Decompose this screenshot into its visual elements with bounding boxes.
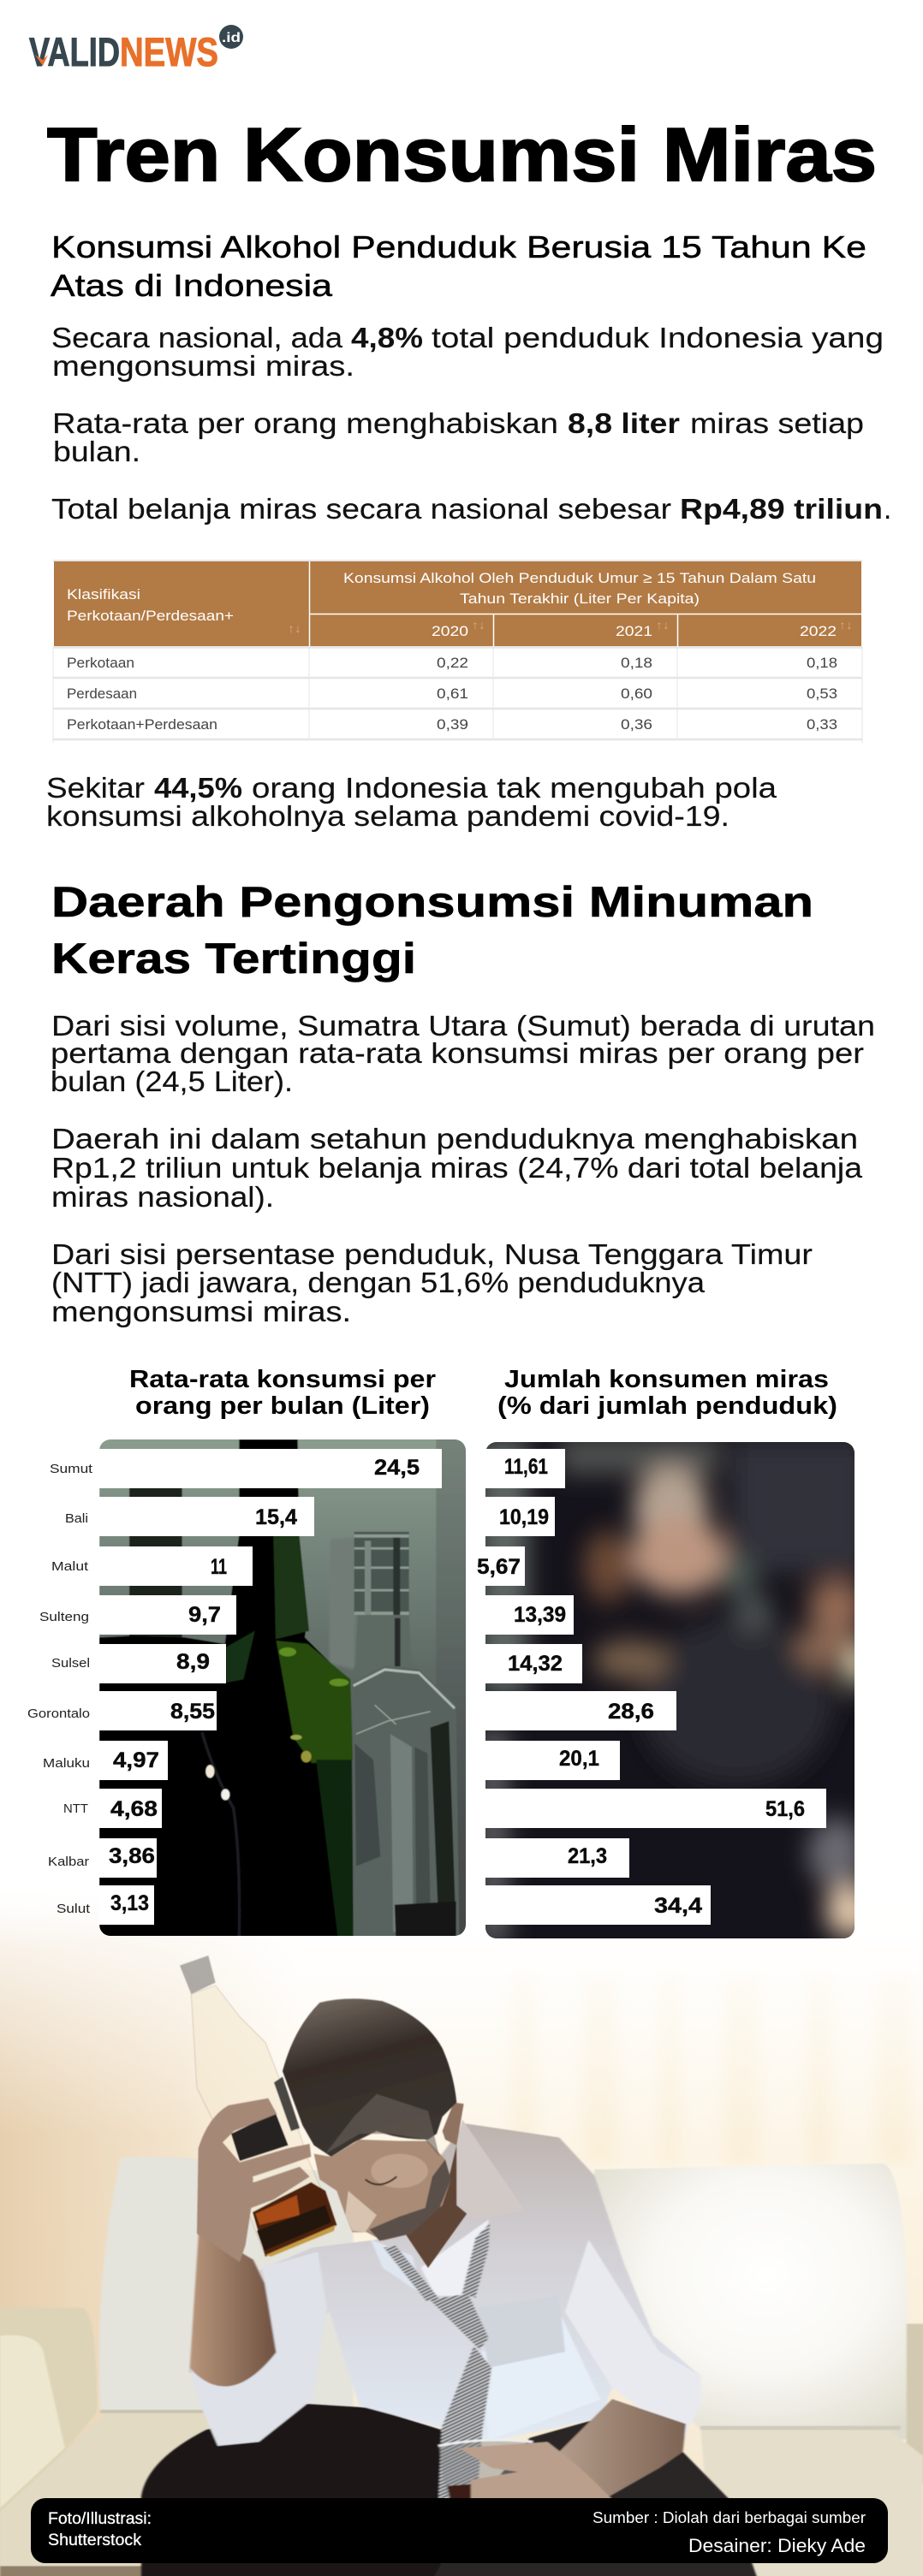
text block: regional findings: bulan (24,5 Liter). xyxy=(51,1065,293,1097)
table row: Perdesaan: 0,53 xyxy=(807,686,837,702)
subheading: national consumption: Konsumsi Alkohol Penduduk Berusia 15 Tahun Ke xyxy=(51,229,866,264)
bar chart: average litres per person per month xyxy=(27,1449,442,1925)
photo credit: Shutterstock xyxy=(48,2531,142,2549)
photo panel: bottles xyxy=(99,1438,470,1947)
table header xyxy=(54,561,861,646)
neck xyxy=(405,2146,471,2268)
subheading: national consumption xyxy=(51,229,866,303)
table row: Perkotaan xyxy=(67,655,837,671)
table row: Perkotaan+Perdesaan: Perkotaan+Perdesaan xyxy=(67,716,217,733)
text block: regional findings xyxy=(51,1010,875,1327)
text block: national figures: Rp4,89 triliun xyxy=(680,493,883,525)
bar values: 15,4 xyxy=(255,1505,297,1529)
region labels: Sulut xyxy=(57,1902,91,1916)
footer bar: credits xyxy=(31,2498,888,2563)
bar values: 8,9 xyxy=(176,1650,210,1674)
glass and hand xyxy=(438,2440,533,2500)
bar values: 20,1 xyxy=(559,1747,599,1771)
logo: Validnews.id: .id xyxy=(222,31,241,45)
text block: regional findings: Dari sisi persentase penduduk, Nusa Tenggara Timur xyxy=(51,1238,813,1270)
region labels: Bali xyxy=(65,1511,88,1526)
bar values: 10,19 xyxy=(499,1505,549,1529)
title: Tren Konsumsi Miras xyxy=(47,112,877,197)
table row: Perdesaan xyxy=(67,686,837,702)
clear bottle xyxy=(350,1532,460,1947)
table row: Perkotaan: 0,18 xyxy=(807,655,837,671)
bar values: 11 xyxy=(211,1555,227,1579)
subheading: national consumption: Atas di Indonesia xyxy=(51,268,333,303)
section heading: highest consuming regions: Daerah Pengonsumsi Minuman xyxy=(51,878,813,926)
shirt xyxy=(256,2123,700,2442)
region labels: Gorontalo xyxy=(27,1706,90,1721)
trousers xyxy=(141,2404,442,2576)
table row: Perkotaan+Perdesaan xyxy=(67,716,837,733)
chart heading: average consumption xyxy=(129,1366,436,1420)
photo panel: blurred drinker xyxy=(479,1438,876,1947)
table row: Perkotaan: Perkotaan xyxy=(67,655,134,671)
tie xyxy=(384,2223,491,2498)
bar values: 8,55 xyxy=(170,1700,215,1724)
section heading: highest consuming regions xyxy=(51,878,813,982)
bars xyxy=(99,1449,442,1925)
bar values: 21,3 xyxy=(568,1844,607,1868)
bar values: 51,6 xyxy=(765,1797,805,1821)
table row: Perdesaan: 0,61 xyxy=(437,686,468,702)
sofa xyxy=(0,2157,923,2576)
text block: regional findings: miras nasional). xyxy=(51,1181,274,1213)
table header: Konsumsi Alkohol Oleh Penduduk Umur ≥ 15 Tahun Dalam Satu xyxy=(343,570,816,586)
table header: ↑↓ xyxy=(472,618,485,632)
top fade into page xyxy=(0,1883,923,1943)
table: alcohol consumption per capita xyxy=(53,560,862,743)
bars xyxy=(485,1449,826,1925)
table header: 2021 xyxy=(616,623,652,639)
text block: national figures: Total belanja miras secara nasional sebesar xyxy=(51,493,671,525)
table header: ↑↓ xyxy=(839,618,853,632)
head, bottle and hand xyxy=(180,1956,525,2268)
raised arm xyxy=(188,2234,277,2387)
source and designer: Sumber : Diolah dari berbagai sumber xyxy=(593,2509,866,2526)
table row: Perkotaan+Perdesaan: 0,36 xyxy=(621,716,652,733)
bar values xyxy=(109,1456,420,1915)
table row: Perkotaan+Perdesaan: 0,33 xyxy=(807,716,837,733)
section heading: highest consuming regions: Keras Tertinggi xyxy=(51,935,416,982)
text block: national figures: Rata-rata per orang menghabiskan xyxy=(52,407,558,439)
region labels: Sulteng xyxy=(39,1610,89,1624)
face xyxy=(314,2103,464,2241)
table header: Klasifikasi xyxy=(67,586,140,602)
region labels: Sumut xyxy=(50,1462,93,1476)
region labels: Malut xyxy=(51,1559,89,1574)
bar values: 3,13 xyxy=(110,1891,149,1915)
table header: 2022 xyxy=(800,623,837,639)
source and designer: Desainer: Dieky Ade xyxy=(688,2535,866,2556)
chart heading: average consumption: orang per bulan (Liter) xyxy=(135,1392,430,1420)
table header: Tahun Terakhir (Liter Per Kapita) xyxy=(460,591,700,607)
region labels xyxy=(27,1462,93,1916)
source and designer xyxy=(593,2509,866,2556)
text block: regional findings: Dari sisi volume, Sumatra Utara (Sumut) berada di urutan xyxy=(51,1010,875,1042)
region labels: Maluku xyxy=(43,1756,90,1771)
text block: national figures xyxy=(51,322,891,525)
bar values: 4,68 xyxy=(110,1797,158,1821)
text block: pandemic behaviour: Sekitar xyxy=(46,772,145,804)
man: body xyxy=(141,2123,759,2576)
text block: national figures: Secara nasional, ada xyxy=(51,322,343,353)
text block: national figures: bulan. xyxy=(53,436,140,467)
bar values: 14,32 xyxy=(508,1652,563,1676)
text block: regional findings: Daerah ini dalam setahun penduduknya menghabiskan xyxy=(51,1123,858,1154)
table row: Perdesaan: 0,60 xyxy=(621,686,652,702)
text block: regional findings: mengonsumsi miras. xyxy=(51,1296,351,1327)
bar chart: consumers as share of population xyxy=(477,1449,826,1925)
bar values xyxy=(477,1455,805,1918)
text block: national figures: 4,8% xyxy=(351,322,423,353)
bar values: 9,7 xyxy=(188,1603,221,1627)
chart heading: average consumption: Rata-rata konsumsi per xyxy=(129,1366,436,1393)
chart heading: share of consumers xyxy=(497,1366,837,1420)
bar values: 5,67 xyxy=(477,1555,521,1579)
photo credit xyxy=(48,2510,152,2549)
logo: Validnews.id: NEWS xyxy=(120,29,218,74)
chart heading: share of consumers: Jumlah konsumen miras xyxy=(504,1366,829,1393)
text block: national figures: . xyxy=(884,493,891,525)
forearm xyxy=(559,2399,686,2498)
table header: Perkotaan/Perdesaan+ xyxy=(67,608,234,624)
text block: regional findings: pertama dengan rata-rata konsumsi miras per orang per xyxy=(51,1037,864,1069)
chart heading: share of consumers: (% dari jumlah penduduk) xyxy=(497,1392,837,1420)
hair xyxy=(283,1998,456,2157)
bar values: 28,6 xyxy=(608,1700,654,1724)
table row: Perkotaan: 0,22 xyxy=(437,655,468,671)
table row: Perkotaan: 0,18 xyxy=(621,655,652,671)
text block: national figures: 8,8 liter xyxy=(568,407,680,439)
text block: pandemic behaviour xyxy=(46,772,777,832)
text block: national figures: total penduduk Indonesia yang xyxy=(432,322,884,353)
region labels: Sulsel xyxy=(51,1656,90,1671)
hand on bottle xyxy=(197,2098,311,2262)
text block: pandemic behaviour: konsumsi alkoholnya selama pandemi covid-19. xyxy=(46,800,729,832)
collar xyxy=(456,2120,525,2219)
table row: Perkotaan+Perdesaan: 0,39 xyxy=(437,716,468,733)
logo: Validnews.id xyxy=(29,25,243,74)
bar values: 24,5 xyxy=(374,1456,420,1480)
text block: regional findings: Rp1,2 triliun untuk belanja miras (24,7% dari total belanja xyxy=(51,1152,863,1184)
bar values: 3,86 xyxy=(109,1844,155,1868)
table header: 2020 xyxy=(432,623,468,639)
text block: national figures: miras setiap xyxy=(690,407,864,439)
table header: ↑↓ xyxy=(288,621,301,635)
region labels: Kalbar xyxy=(48,1855,89,1869)
photo credit: Foto/Illustrasi: xyxy=(48,2510,152,2528)
wall and curtains xyxy=(0,1879,923,2576)
background photo: man drinking on sofa xyxy=(0,1879,923,2576)
text block: regional findings: (NTT) jadi jawara, dengan 51,6% penduduknya xyxy=(51,1267,706,1298)
bar values: 4,97 xyxy=(113,1748,159,1772)
text block: pandemic behaviour: orang Indonesia tak mengubah pola xyxy=(252,772,777,804)
bar values: 11,61 xyxy=(504,1455,548,1479)
open shirt front xyxy=(421,2220,489,2295)
region labels: NTT xyxy=(63,1801,88,1816)
bar values: 13,39 xyxy=(514,1603,566,1627)
text block: national figures: mengonsumsi miras. xyxy=(52,350,354,382)
bar values: 34,4 xyxy=(654,1894,702,1918)
table row: Perdesaan: Perdesaan xyxy=(67,686,137,702)
logo: Validnews.id: VALID xyxy=(29,29,120,74)
table header: ↑↓ xyxy=(656,618,670,632)
text block: pandemic behaviour: 44,5% xyxy=(154,772,242,804)
bottle xyxy=(180,1956,336,2257)
